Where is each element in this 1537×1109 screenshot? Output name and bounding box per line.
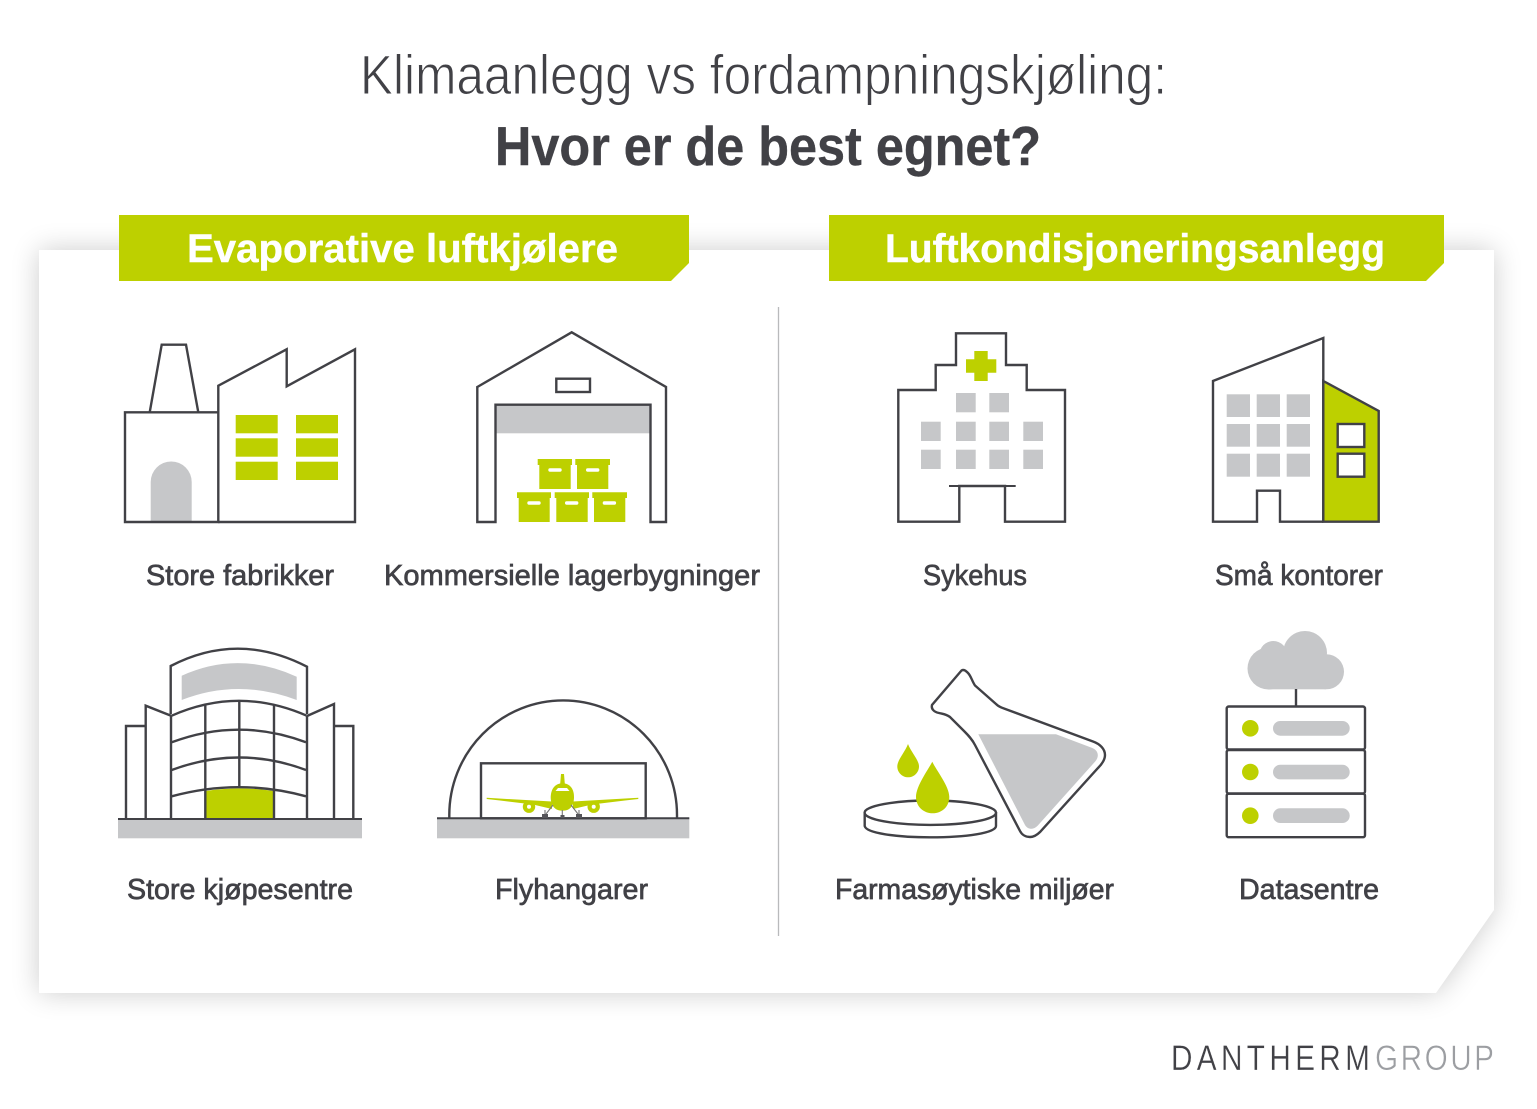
cloud: [1248, 631, 1344, 690]
label: large shopping centres: Store kjøpesentre: [127, 874, 353, 906]
plane: [487, 774, 638, 818]
label: data centres: Datasentre: [1239, 874, 1379, 906]
label: hospitals: Sykehus: [923, 560, 1027, 592]
logo: Dantherm Group: [1171, 1039, 1494, 1078]
icon: small office: [1213, 338, 1379, 522]
label: pharmaceutical environments: Farmasøytiske miljøer: [835, 874, 1114, 906]
label: aircraft hangars: Flyhangarer: [495, 874, 648, 906]
label: large factories: Store fabrikker: [146, 560, 334, 592]
icon: hospital: [898, 333, 1065, 522]
title: Hvor er de best egnet?: [495, 115, 1041, 177]
label: commercial warehouses: Kommersielle lagerbygninger: [384, 560, 760, 592]
heading: air conditioning systems: [829, 215, 1444, 281]
title: [360, 43, 1167, 177]
icon: aircraft hangar: [437, 700, 689, 838]
heading: evaporative air coolers: [119, 215, 689, 281]
heading: air conditioning systems: Luftkondisjoneringsanlegg: [885, 227, 1385, 271]
heading: evaporative air coolers: Evaporative luftkjølere: [187, 227, 618, 271]
logo: Dantherm Group: GROUP: [1375, 1039, 1494, 1078]
icon: warehouse: [477, 332, 666, 522]
icon: flask and petri dish: [865, 670, 1105, 837]
logo: Dantherm Group: DANTHERM: [1171, 1039, 1370, 1078]
icon: data centre with cloud: [1227, 631, 1365, 837]
title: Klimaanlegg vs fordampningskjøling:: [360, 43, 1167, 106]
panel: main card: [39, 250, 1494, 993]
label: small offices: Små kontorer: [1215, 560, 1383, 592]
icon: shopping mall: [118, 649, 362, 838]
icon: factory: [125, 345, 355, 522]
